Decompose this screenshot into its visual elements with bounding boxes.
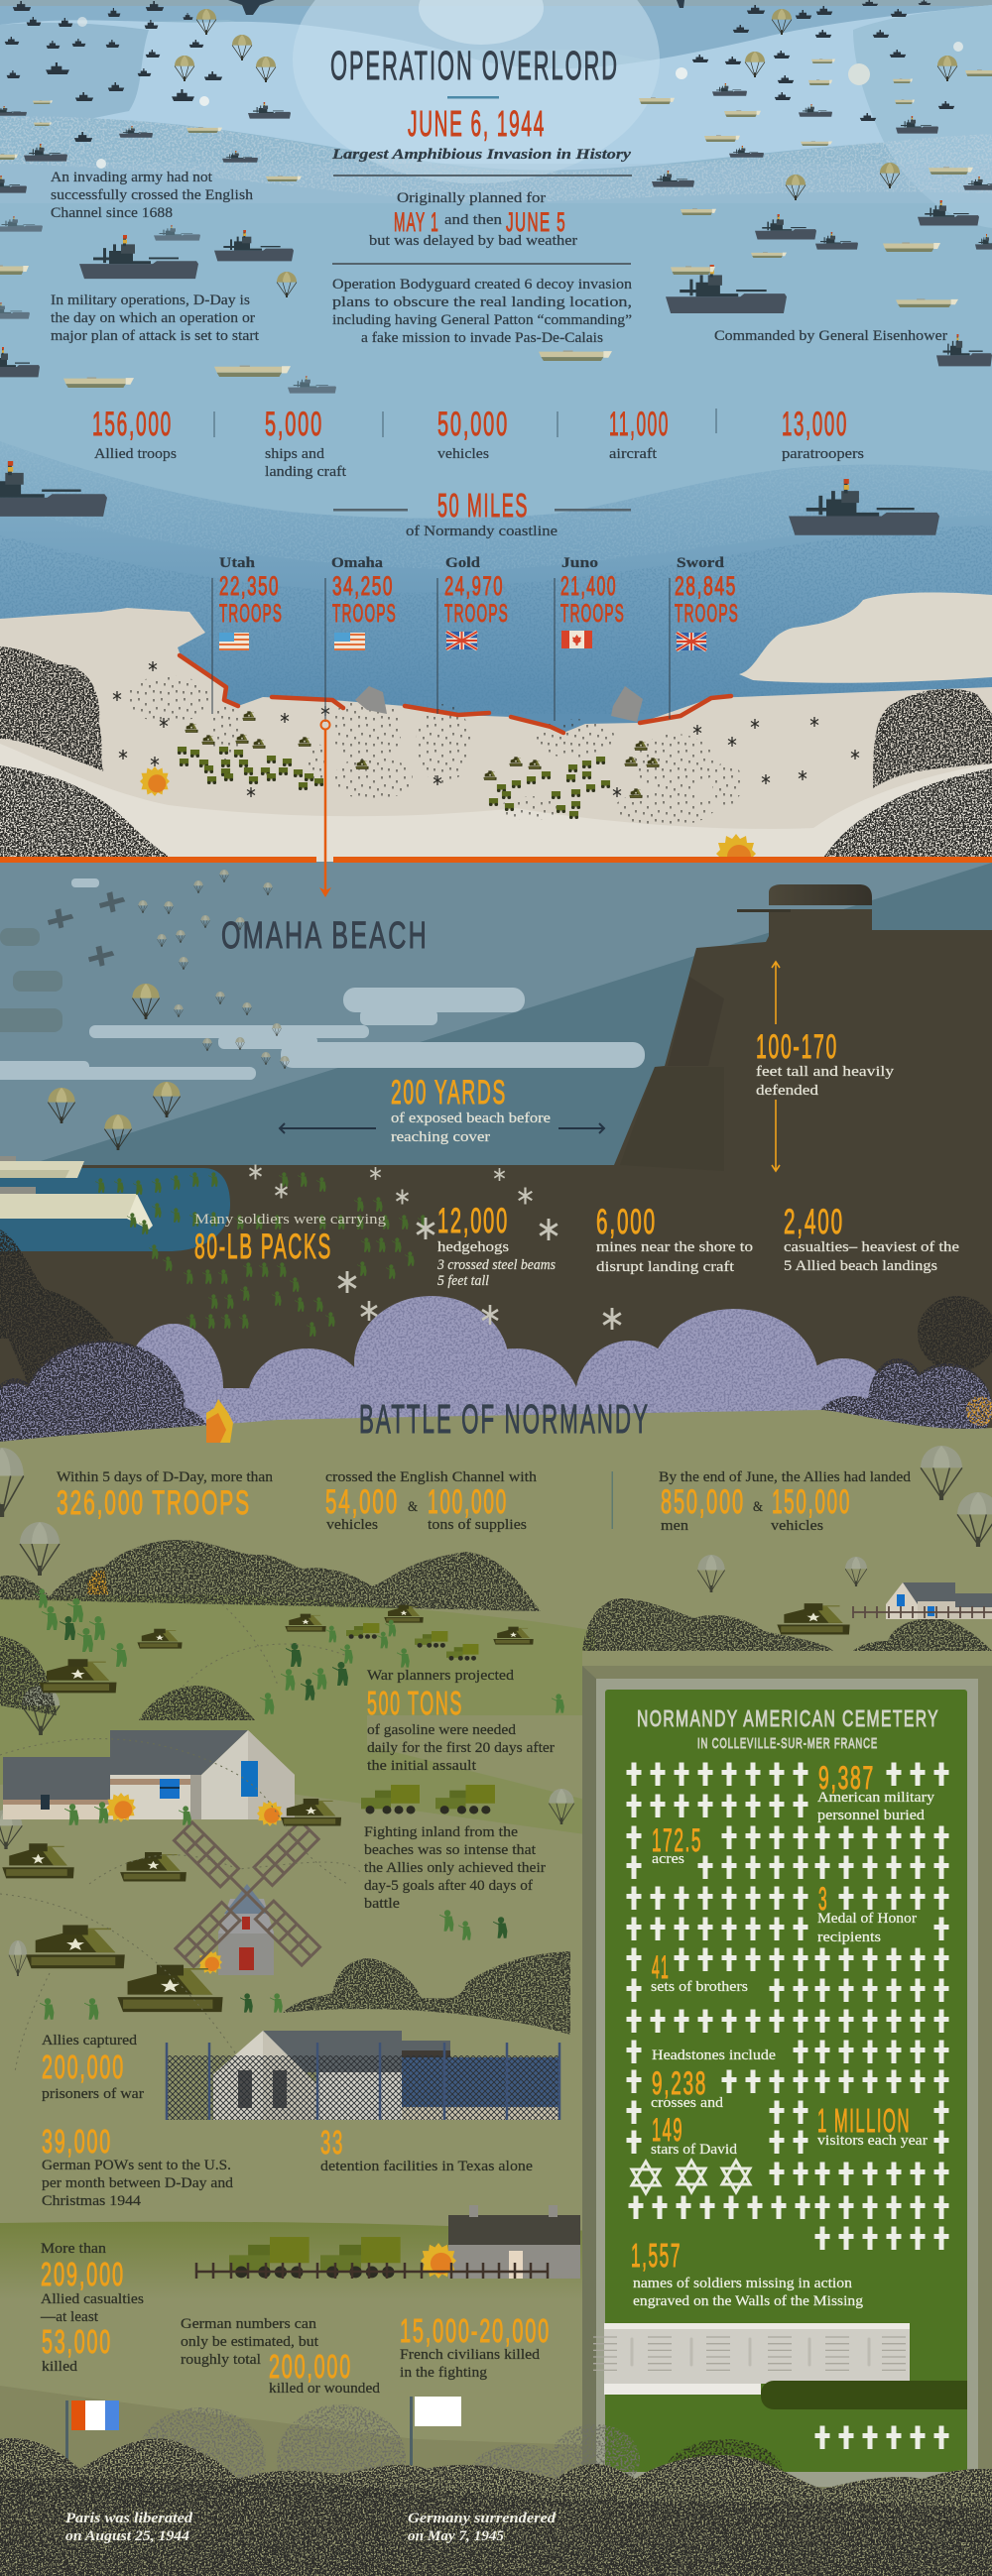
flag: white surrender <box>410 2397 461 2484</box>
text: german pows: per month between D-Day and <box>42 2175 234 2191</box>
wall of the missing <box>593 2323 967 2409</box>
text: invading army: successfully crossed the English <box>51 187 254 203</box>
beach: juno: 21,400 <box>560 571 617 601</box>
beach: gold <box>444 555 509 649</box>
milestone: germany: on May 7, 1945 <box>408 2528 504 2544</box>
text: german pows <box>42 2123 234 2209</box>
green land <box>0 1410 992 2576</box>
milestone: paris: Paris was liberated <box>65 2511 193 2526</box>
text: german pows: German POWs sent to the U.S. <box>42 2158 231 2173</box>
milestone: germany <box>408 2511 557 2544</box>
stat: brothers: sets of brothers <box>651 1979 748 1995</box>
stats row: landing craft <box>265 464 347 480</box>
callout: 200 yards: of exposed beach before <box>391 1111 551 1126</box>
dark corner bushes <box>0 1296 992 1477</box>
callout: mines <box>596 1203 753 1275</box>
callout: packs <box>194 1212 387 1266</box>
text: original plan dates <box>332 190 631 265</box>
orange pointer to omaha <box>0 720 992 897</box>
heading: fifty miles: 50 MILES <box>437 487 529 524</box>
callout: hedgehogs: hedgehogs <box>437 1239 509 1255</box>
beach: sword: 28,845 <box>675 571 737 601</box>
callout: casualties <box>784 1203 959 1274</box>
text: german losses: roughly total <box>181 2352 261 2368</box>
text: original plan dates: JUNE 5 <box>506 207 566 237</box>
stat: first 5 days: 326,000 TROOPS <box>57 1484 251 1522</box>
beach: sword: Sword <box>677 555 725 571</box>
flag: uk <box>677 633 706 650</box>
cemetery frame <box>582 1666 992 2489</box>
stats row: 11,000 <box>609 406 670 443</box>
text: operation bodyguard: including having General Patton “commanding” <box>332 312 632 328</box>
speckled bush on cemetery <box>665 2439 784 2509</box>
flag: usa <box>334 633 365 650</box>
text: war planners projected: daily for the first 20 days after <box>367 1740 555 1756</box>
text: allied casualties: Allied casualties <box>41 2291 144 2307</box>
heading: fifty miles: of Normandy coastline <box>406 524 558 539</box>
beach: juno: Juno <box>561 555 598 571</box>
stat: medal of honor: Medal of Honor <box>817 1911 917 1927</box>
farmhouse on the horizon <box>853 1582 992 1619</box>
stars of david <box>632 2161 750 2193</box>
speckled hedgerows <box>0 1540 992 2035</box>
arrow: cliff height <box>772 962 780 1171</box>
stat: headstones: 149 <box>652 2112 683 2148</box>
title: OPERATION OVERLORD <box>330 43 619 88</box>
callout: hedgehogs: 12,000 <box>437 1202 509 1240</box>
text: war planners projected: 500 TONS <box>367 1685 463 1721</box>
parachutes over land <box>0 1446 992 1976</box>
milestone: germany: Germany surrendered <box>408 2511 557 2526</box>
callout: casualties: casualties– heaviest of the <box>784 1239 959 1255</box>
heading: omaha beach: OMAHA BEACH <box>221 915 429 957</box>
text: fighting inland: the Allies only achieved their <box>364 1860 546 1876</box>
callout: casualties: 2,400 <box>784 1203 844 1241</box>
text: commander: Commanded by General Eisenhower <box>714 328 947 344</box>
text: original plan dates: MAY 1 <box>394 207 439 237</box>
stat: crossed the channel <box>325 1469 538 1533</box>
callout: mines: disrupt landing craft <box>596 1259 735 1275</box>
flames in the distance <box>87 1396 992 1594</box>
stat: headstones: Headstones include <box>652 2048 776 2063</box>
callout: casualties: 5 Allied beach landings <box>784 1258 937 1274</box>
stat: medal of honor: 3 <box>818 1881 828 1917</box>
beach hedgehog obstacles <box>113 661 859 797</box>
panel heading: IN COLLEVILLE-SUR-MER FRANCE <box>697 1735 878 1752</box>
date: JUNE 6, 1944 <box>408 103 546 144</box>
stat: walls of the missing: names of soldiers missing in action <box>633 2276 853 2291</box>
rocky outcrops <box>355 686 643 722</box>
stat: acres: 172.5 <box>652 1822 702 1858</box>
text: d-day definition: the day on which an operation or <box>51 310 255 326</box>
callout: packs: Many soldiers were carrying <box>194 1212 387 1228</box>
windmill sails <box>174 1820 320 1967</box>
text: operation bodyguard <box>332 277 633 346</box>
stats row: ships and <box>265 446 325 462</box>
flag: usa <box>219 633 249 650</box>
stat: end of june: 150,000 <box>772 1483 851 1521</box>
beach: gold: Gold <box>445 555 481 571</box>
stat: headstones <box>651 2048 776 2158</box>
farmhouse <box>3 1730 295 1826</box>
section: omaha beach <box>0 720 992 1467</box>
windmill <box>174 1820 320 1975</box>
stats row: Allied troops <box>94 446 177 462</box>
stat: crossed the channel: tons of supplies <box>428 1517 527 1533</box>
stat: first 5 days: Within 5 days of D-Day, more than <box>57 1469 274 1485</box>
soldiers <box>35 1588 564 2020</box>
text: detention facilities: detention facilities in Texas alone <box>320 2159 533 2174</box>
text: allied casualties: More than <box>41 2241 107 2257</box>
text: german losses: German numbers can <box>181 2316 317 2332</box>
prison camp behind fence <box>167 2031 560 2120</box>
beach: omaha: TROOPS <box>332 600 397 628</box>
speckled bush on the left of the beach <box>0 1229 114 1339</box>
panel: normandy american cemetery <box>582 1666 992 2489</box>
text: german losses: killed or wounded <box>269 2381 381 2397</box>
speckled hedgerows <box>0 646 992 858</box>
beach: juno <box>560 555 625 648</box>
beach: gold: 24,970 <box>444 571 504 601</box>
ship fleet <box>0 0 992 394</box>
section: battle of normandy <box>0 1296 992 2576</box>
troop dot clusters <box>127 675 742 826</box>
stat: first 5 days <box>57 1469 274 1522</box>
text: war planners projected <box>367 1668 555 1774</box>
text: fighting inland: Fighting inland from the <box>364 1824 518 1840</box>
closing hedgerows and milestones <box>0 2397 992 2576</box>
trucks <box>346 1623 495 1815</box>
callout: packs: 80-LB PACKS <box>194 1228 332 1266</box>
text: german losses: only be estimated, but <box>181 2334 319 2350</box>
beach vehicles and tanks <box>178 711 660 819</box>
title block <box>330 43 632 176</box>
large paratroopers <box>48 984 181 1150</box>
planes <box>46 889 127 969</box>
text: d-day definition: major plan of attack is set to start <box>51 328 260 344</box>
text: allied casualties: 53,000 <box>42 2323 112 2360</box>
clouds <box>0 878 645 1080</box>
text: war planners projected: the initial assault <box>367 1758 477 1774</box>
small paratroopers <box>138 870 290 1069</box>
text: allied casualties: 209,000 <box>41 2256 125 2292</box>
advance routes <box>0 1596 362 2072</box>
text: prisoners of war: prisoners of war <box>42 2086 144 2102</box>
stat: medal of honor <box>817 1881 917 1945</box>
text: invading army: An invading army had not <box>51 170 213 185</box>
subtitle: Largest Amphibious Invasion in History <box>331 147 631 163</box>
text: french civilians: 15,000-20,000 <box>400 2312 551 2349</box>
stat: buried: personnel buried <box>817 1808 926 1823</box>
text: detention facilities: 33 <box>320 2124 344 2161</box>
stats row: 13,000 <box>782 406 848 443</box>
stats row: paratroopers <box>782 446 864 462</box>
stat: medal of honor: recipients <box>817 1930 881 1945</box>
soldiers storming the beach <box>95 1172 428 1337</box>
callout: cliff height: defended <box>756 1083 819 1099</box>
callout: 200 yards: reaching cover <box>391 1129 490 1145</box>
speckle on purple hills <box>124 1296 893 1467</box>
beach: utah: 22,350 <box>219 571 280 601</box>
text: allied casualties <box>40 2241 144 2375</box>
text: d-day definition <box>51 293 260 344</box>
grey bushes behind <box>137 2404 640 2514</box>
text: operation bodyguard: plans to obscure the real landing location, <box>332 294 632 310</box>
text: original plan dates: Originally planned for <box>397 190 546 206</box>
text: detention facilities <box>320 2124 533 2174</box>
milestone: paris: on August 25, 1944 <box>65 2528 190 2544</box>
stats row: vehicles <box>437 446 489 462</box>
stat: acres <box>652 1822 702 1867</box>
text: fighting inland: beaches was so intense that <box>364 1842 537 1858</box>
text: prisoners of war: Allies captured <box>42 2033 138 2049</box>
stat: end of june: By the end of June, the Allies had landed <box>659 1469 912 1485</box>
stat: buried: 9,387 <box>818 1760 875 1796</box>
text: german losses: 200,000 <box>269 2348 352 2385</box>
text: french civilians: in the fighting <box>400 2365 488 2381</box>
text: prisoners of war <box>42 2033 144 2102</box>
tanks <box>2 1603 850 2012</box>
stat: end of june: men <box>661 1518 689 1534</box>
stat: crossed the channel: & <box>408 1499 418 1515</box>
beach: utah: Utah <box>219 555 256 571</box>
callout: hedgehogs <box>436 1202 556 1289</box>
text: invading army: Channel since 1688 <box>51 205 173 221</box>
parachutes <box>175 9 957 297</box>
stat: crossed the channel: crossed the English Channel with <box>325 1469 538 1485</box>
stat: visitors <box>817 2102 928 2149</box>
sea background <box>0 0 992 555</box>
beach sector lines <box>212 578 670 722</box>
water with landing craft <box>0 1156 230 1251</box>
stat: crossed the channel: 100,000 <box>428 1483 508 1521</box>
text: war planners projected: War planners projected <box>367 1668 515 1684</box>
text: german losses <box>181 2316 381 2397</box>
cliff and bunker <box>0 884 992 1467</box>
purple hills <box>124 1296 893 1467</box>
stat: buried <box>817 1760 935 1823</box>
beach: gold: TROOPS <box>444 600 509 628</box>
stat: brothers <box>651 1949 748 1995</box>
heading: battle of normandy: BATTLE OF NORMANDY <box>359 1396 650 1442</box>
beach: sword: TROOPS <box>675 600 739 628</box>
section: the invasion at sea <box>0 0 992 555</box>
callout: cliff height: feet tall and heavily <box>756 1064 895 1080</box>
beach land <box>0 593 992 863</box>
text: invading army <box>51 170 254 221</box>
callout: hedgehogs: 3 crossed steel beams <box>436 1257 556 1273</box>
stat: walls of the missing: 1,557 <box>631 2237 682 2274</box>
callout: 200 yards: 200 YARDS <box>391 1074 507 1112</box>
beach: juno: TROOPS <box>560 600 625 628</box>
stat: visitors: visitors each year <box>817 2133 928 2149</box>
text: german pows: Christmas 1944 <box>42 2193 142 2209</box>
callout: mines: 6,000 <box>596 1203 657 1241</box>
rows of crosses <box>627 1763 948 2449</box>
text: fighting inland <box>364 1824 546 1912</box>
text: fighting inland: day-5 goals after 40 days of <box>364 1878 533 1894</box>
callout: hedgehogs: 5 feet tall <box>437 1273 489 1289</box>
heading: fifty miles <box>333 487 631 539</box>
omaha hedgehogs drawn over the hills <box>250 1164 621 1330</box>
text: french civilians <box>400 2312 551 2381</box>
omaha sky <box>0 862 992 1169</box>
stat: end of june: 850,000 <box>661 1483 745 1521</box>
callout: cliff height <box>756 962 895 1171</box>
flag: france <box>65 2400 119 2487</box>
text: war planners projected: of gasoline were needed <box>367 1722 517 1738</box>
stat: end of june: & <box>753 1499 763 1515</box>
stat: headstones: 9,238 <box>652 2065 707 2101</box>
text: french civilians: French civilians killed <box>400 2347 541 2363</box>
stat: buried: American military <box>817 1790 935 1806</box>
text: operation bodyguard: Operation Bodyguard created 6 decoy invasion <box>332 277 633 293</box>
callout: cliff height: 100-170 <box>756 1028 838 1066</box>
ships offshore <box>0 461 939 535</box>
stats row: 5,000 <box>265 406 323 443</box>
text: d-day definition: In military operations, D-Day is <box>51 293 250 308</box>
flag: uk <box>446 632 477 649</box>
stat: acres: acres <box>652 1851 684 1867</box>
stat: crossed the channel: vehicles <box>326 1517 378 1533</box>
text: operation bodyguard: a fake mission to invade Pas-De-Calais <box>361 330 603 346</box>
milestone: paris <box>65 2511 193 2544</box>
beach: utah: TROOPS <box>219 600 283 628</box>
stat: headstones: crosses and <box>651 2095 724 2111</box>
dark foreground bushes <box>0 2438 992 2576</box>
text: german pows: 39,000 <box>42 2123 112 2160</box>
panel heading <box>637 1705 939 1752</box>
callout: mines: mines near the shore to <box>596 1239 753 1255</box>
beach: omaha: Omaha <box>331 555 384 571</box>
red landing front lines <box>180 655 731 733</box>
stat: brothers: 41 <box>652 1949 670 1985</box>
beach: utah <box>219 555 283 650</box>
stats row: 156,000 <box>92 406 173 443</box>
text: allied casualties: killed <box>42 2359 78 2375</box>
stat: crossed the channel: 54,000 <box>325 1483 399 1521</box>
stat: walls of the missing: engraved on the Walls of the Missing <box>633 2293 864 2309</box>
explosions on the beach <box>140 766 756 874</box>
stats row <box>92 406 864 480</box>
beach: omaha <box>331 555 397 650</box>
text: original plan dates: but was delayed by bad weather <box>369 233 577 249</box>
flag: canada <box>561 631 592 648</box>
stat: end of june: vehicles <box>771 1518 823 1534</box>
arrows: beach width <box>280 1123 604 1133</box>
stats row: aircraft <box>609 446 658 462</box>
text: prisoners of war: 200,000 <box>42 2049 125 2085</box>
text: fighting inland: battle <box>364 1896 400 1912</box>
beach: sword <box>675 555 739 650</box>
stats row: 50,000 <box>437 406 509 443</box>
stat: headstones: stars of David <box>651 2142 738 2158</box>
section: normandy coastline <box>0 441 992 874</box>
text: allied casualties: —at least <box>40 2309 99 2325</box>
deep water <box>0 441 992 863</box>
beach: omaha: 34,250 <box>332 571 394 601</box>
convoy, house and fence <box>196 2205 580 2279</box>
stat: walls of the missing <box>631 2237 864 2309</box>
text: original plan dates: and then <box>444 212 503 228</box>
stat: end of june <box>659 1469 912 1534</box>
landing craft <box>0 59 992 388</box>
aircraft silhouettes and smoke puffs <box>77 0 963 169</box>
callout: 200 yards <box>280 1074 604 1145</box>
